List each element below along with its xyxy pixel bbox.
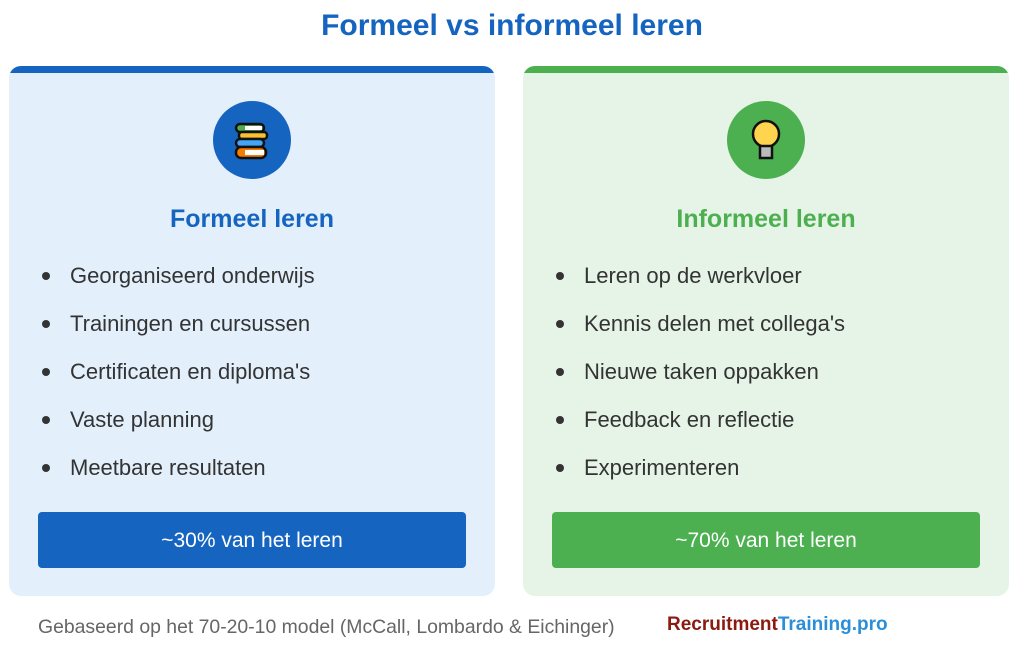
list: Vaste planning <box>70 407 214 432</box>
list: Certificaten en diploma's <box>70 359 310 384</box>
button: 70%: ~70% van het leren <box>675 529 857 552</box>
icon: books <box>213 101 291 179</box>
heading: Formeel leren <box>170 205 334 233</box>
button: 30%: ~30% van het leren <box>161 529 343 552</box>
logo: RecruitmentTraining.pro <box>667 614 888 635</box>
list: Kennis delen met collega's <box>584 311 845 336</box>
list: Leren op de werkvloer <box>584 263 802 288</box>
panel: formeel <box>9 66 495 596</box>
button: 30% <box>38 512 466 568</box>
list: Feedback en reflectie <box>584 407 794 432</box>
list: Nieuwe taken oppakken <box>584 359 819 384</box>
panel: informeel <box>523 66 1009 596</box>
list: Experimenteren <box>584 455 739 480</box>
button: 70% <box>552 512 980 568</box>
list <box>42 263 315 480</box>
title: Formeel vs informeel leren <box>321 9 703 42</box>
list <box>556 263 845 480</box>
heading: Informeel leren <box>676 205 856 233</box>
list: Meetbare resultaten <box>70 455 266 480</box>
list: Georganiseerd onderwijs <box>70 263 315 288</box>
footer note: Gebaseerd op het 70-20-10 model (McCall, Lombardo & Eichinger) <box>38 616 615 638</box>
icon: lightbulb <box>727 101 805 179</box>
list: Trainingen en cursussen <box>70 311 310 336</box>
